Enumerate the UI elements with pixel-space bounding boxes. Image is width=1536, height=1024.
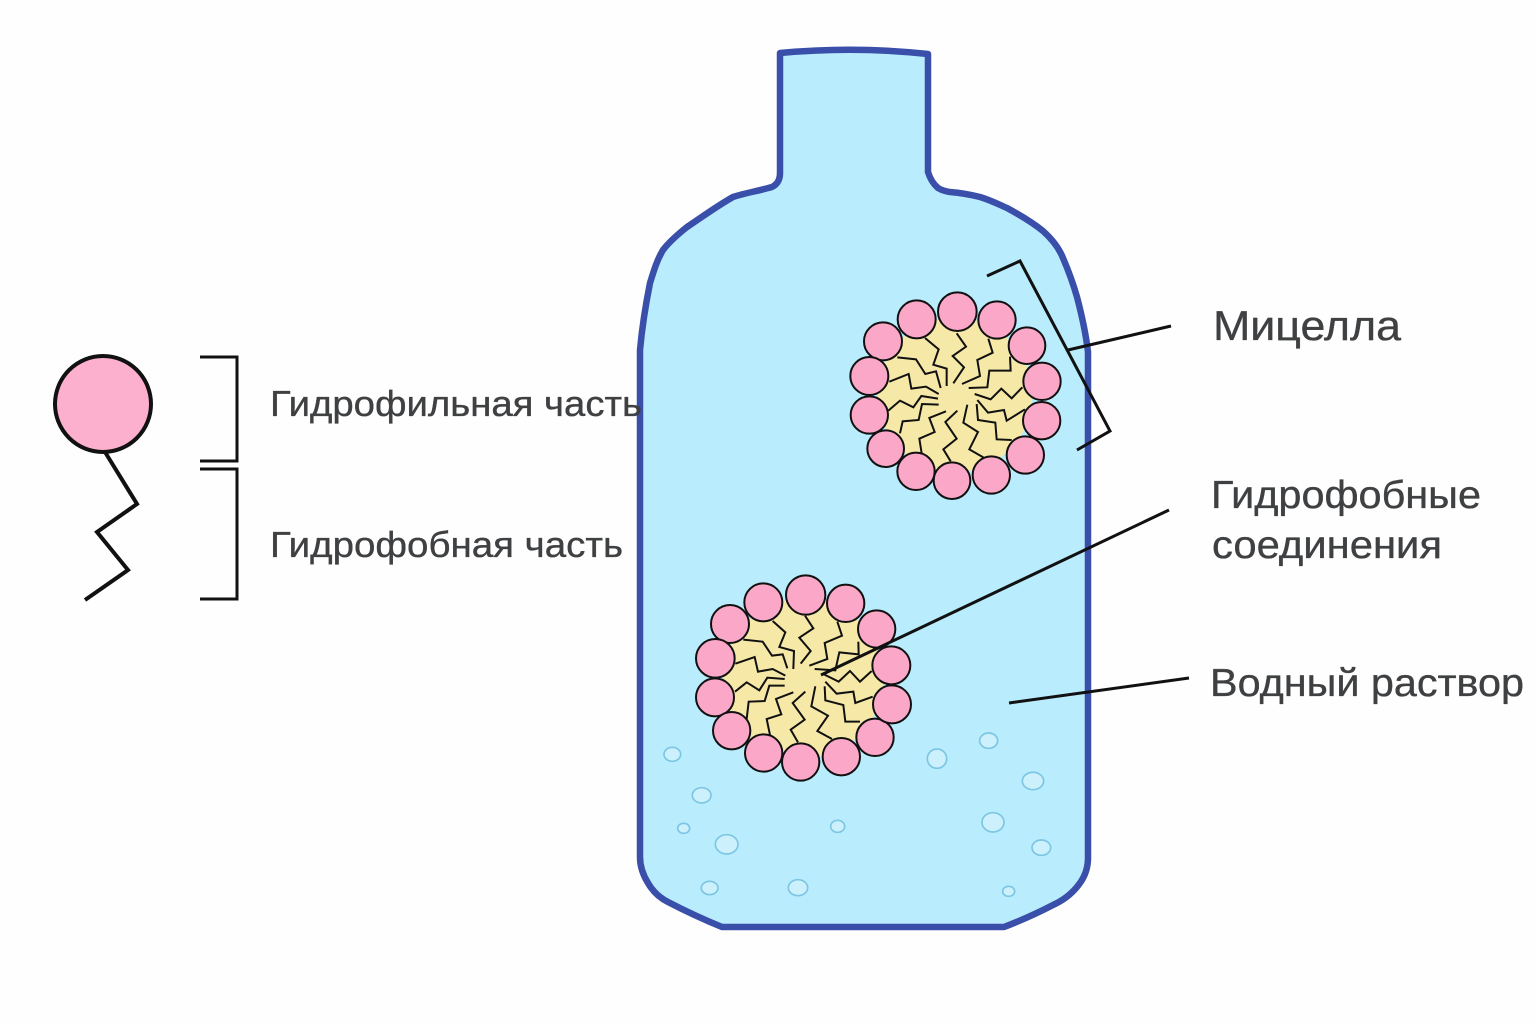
micelle: upper: [850, 292, 1061, 499]
hydrophobic tails: [735, 616, 873, 742]
leader line: aqueous solution: [1009, 678, 1189, 703]
bracket: micelle: [987, 261, 1110, 450]
label: compounds: соединения: [1212, 524, 1442, 567]
icon: hydrophobic tail: [85, 452, 137, 600]
water bubbles: [664, 733, 1051, 896]
label: hydrophobic compounds: Гидрофобные: [1211, 474, 1481, 517]
label: micelle: Мицелла: [1213, 302, 1402, 349]
label: hydrophilic part: Гидрофильная часть: [270, 383, 642, 424]
leader line: micelle: [1068, 326, 1171, 350]
bracket: hydrophilic part: [200, 357, 237, 461]
micelle core: [878, 318, 1032, 472]
hydrophilic heads: [696, 575, 911, 781]
label: aqueous solution: Водный раствор: [1210, 662, 1524, 705]
icon: hydrophilic head: [55, 356, 151, 452]
panel: bottle with aqueous solution: [640, 50, 1088, 927]
diagram: surfactant molecule: [55, 356, 151, 600]
leader line: hydrophobic compounds: [821, 510, 1169, 675]
hydrophobic tails: [888, 333, 1025, 461]
label: hydrophobic part: Гидрофобная часть: [270, 524, 623, 565]
hydrophilic heads: [850, 292, 1061, 499]
micelle: lower: [696, 575, 911, 781]
micelle core: [723, 598, 883, 758]
bracket: hydrophobic part: [200, 469, 237, 599]
